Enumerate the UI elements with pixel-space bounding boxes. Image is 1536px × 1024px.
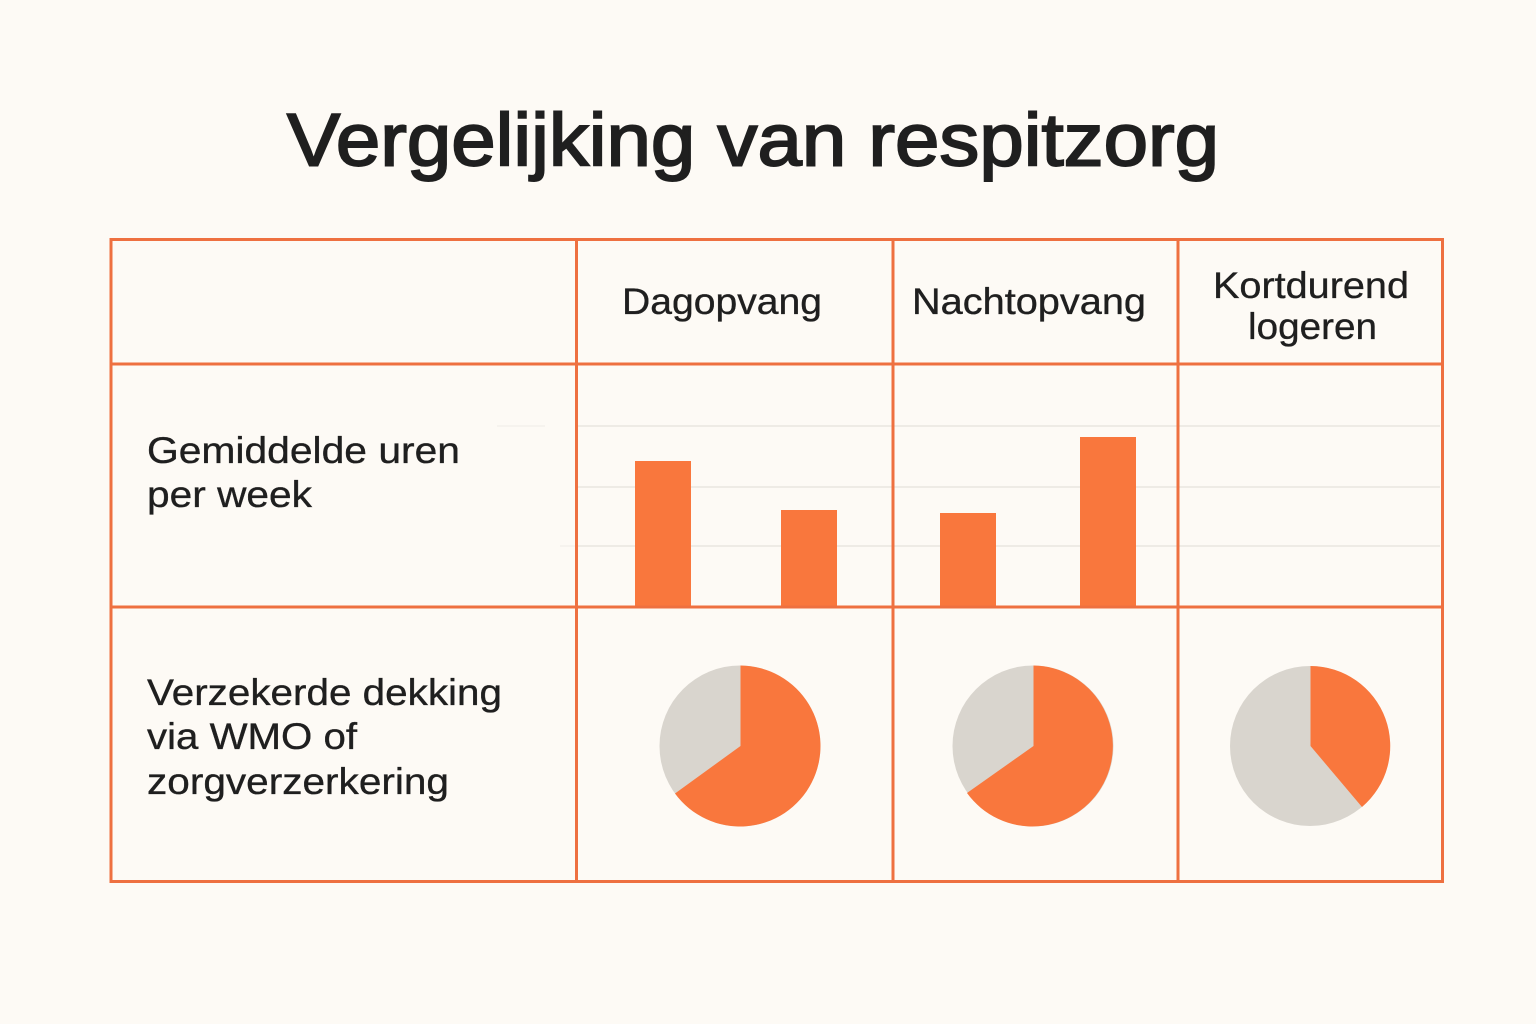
row label: Gemiddelde uren per week bbox=[147, 430, 460, 515]
bar chart: Dagopvang bbox=[635, 461, 837, 607]
title: Vergelijking van respitzorg bbox=[287, 98, 1219, 182]
comparison table bbox=[111, 239, 1442, 882]
row label: Gemiddelde uren per week: per week bbox=[147, 474, 313, 515]
header: Kortdurend logeren: logeren bbox=[1248, 306, 1377, 347]
bar chart: Nachtopvang bbox=[940, 437, 1136, 607]
table grid bbox=[111, 239, 1442, 882]
header: Kortdurend logeren: Kortdurend bbox=[1213, 265, 1409, 306]
row label: Verzekerde dekking: Verzekerde dekking bbox=[147, 672, 502, 713]
row label: Verzekerde dekking: via WMO of bbox=[147, 716, 358, 757]
pie chart: Kortdurend logeren bbox=[1230, 666, 1390, 826]
row label: Gemiddelde uren per week: Gemiddelde uren bbox=[147, 430, 460, 471]
pie chart: Dagopvang bbox=[660, 666, 820, 826]
row label: Verzekerde dekking: zorgverzerkering bbox=[147, 761, 449, 802]
header: Kortdurend logeren bbox=[1213, 265, 1409, 347]
header: Dagopvang: Dagopvang bbox=[622, 281, 822, 322]
header: Nachtopvang: Nachtopvang bbox=[912, 281, 1146, 322]
row label: Verzekerde dekking bbox=[147, 672, 502, 802]
pie chart: Nachtopvang bbox=[952, 666, 1114, 826]
